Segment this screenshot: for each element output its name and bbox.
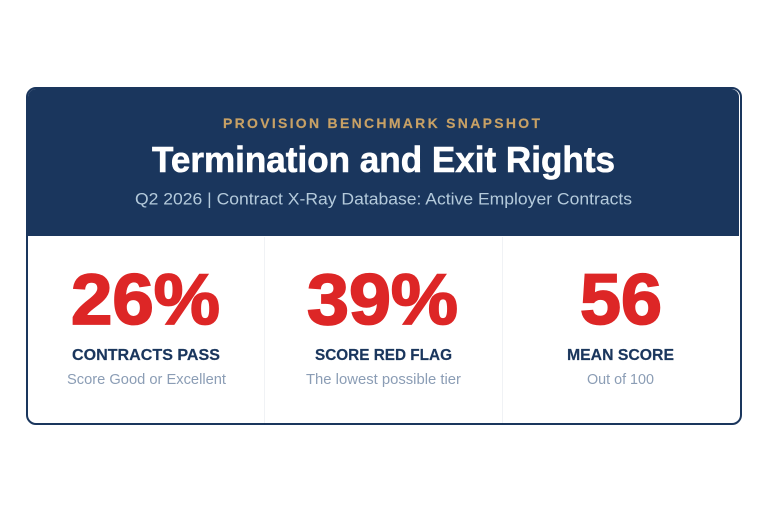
subtitle: Q2 2026 | Contract X-Ray Database: Active Employer Contracts (135, 190, 632, 208)
stat note: Out of 100 (587, 372, 654, 388)
card frame (27, 88, 741, 424)
stat note: The lowest possible tier (306, 372, 461, 388)
stat value: 56 (580, 261, 662, 340)
stat note: Score Good or Excellent (67, 372, 226, 388)
eyebrow label: PROVISION BENCHMARK SNAPSHOT (223, 115, 540, 131)
panel: mean score (567, 261, 674, 388)
stat label: CONTRACTS PASS (72, 347, 220, 364)
stat value: 26% (71, 261, 220, 340)
panel: score red flag (306, 261, 461, 388)
header background (28, 89, 739, 236)
panel: header (28, 89, 739, 236)
stat value: 39% (307, 261, 458, 340)
stat label: MEAN SCORE (567, 347, 674, 364)
title: Termination and Exit Rights (152, 139, 615, 180)
stat label: SCORE RED FLAG (315, 347, 452, 364)
panel: contracts pass (67, 261, 226, 388)
